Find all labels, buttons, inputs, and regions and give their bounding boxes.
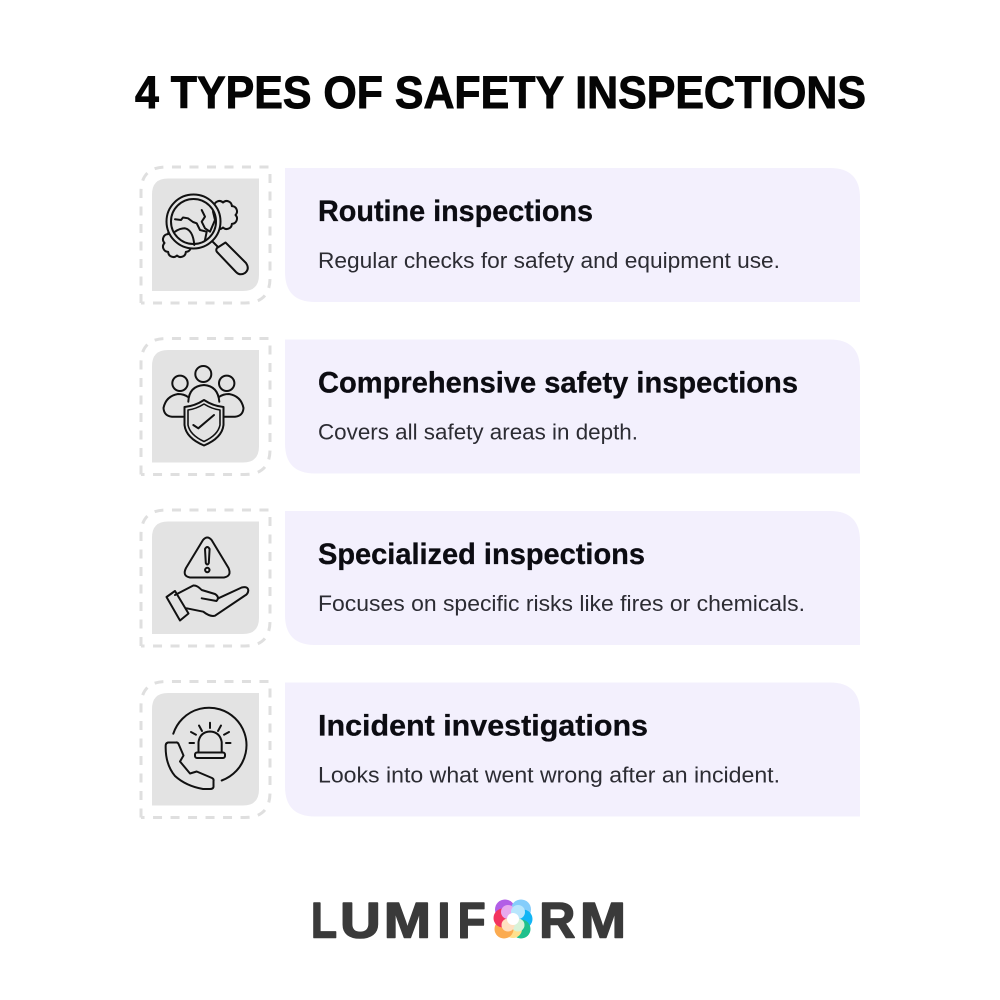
logo: Lumiform: I — [438, 892, 450, 948]
title: 4 TYPES OF SAFETY INSPECTIONS — [135, 67, 866, 118]
heading: Specialized inspections — [318, 538, 645, 571]
card: routine inspections — [285, 168, 860, 302]
description: Covers all safety areas in depth. — [318, 420, 638, 444]
heading: Incident investigations — [318, 710, 648, 742]
heading: Comprehensive safety inspections — [318, 366, 798, 400]
logo: Lumiform: L — [311, 892, 337, 948]
card: comprehensive — [285, 340, 860, 474]
description: Focuses on specific risks like fires or chemicals. — [318, 591, 805, 616]
panel: comprehensive safety inspections — [141, 338, 860, 474]
logo: Lumiform — [311, 892, 626, 948]
logo: Lumiform: U — [340, 892, 381, 948]
logo: Lumiform: M — [384, 892, 431, 948]
panel: specialized inspections — [141, 510, 860, 646]
panel: routine inspections — [141, 167, 860, 303]
panel: incident investigations — [141, 682, 860, 818]
card: specialized — [285, 511, 860, 645]
description: Regular checks for safety and equipment use. — [318, 248, 780, 273]
logo: Lumiform: R — [539, 892, 575, 948]
icon: phone with alarm beacon — [141, 682, 270, 818]
card: incident — [285, 682, 860, 816]
logo: Lumiform: M — [580, 892, 626, 948]
icon: colour flower — [494, 900, 532, 938]
heading: Routine inspections — [318, 195, 593, 228]
logo: Lumiform: F — [458, 892, 486, 948]
description: Looks into what went wrong after an incident. — [318, 762, 780, 788]
icon: magnifier over globe and gears — [141, 167, 270, 303]
icon: team with shield — [141, 338, 270, 474]
icon: warning triangle over hand — [141, 510, 270, 646]
